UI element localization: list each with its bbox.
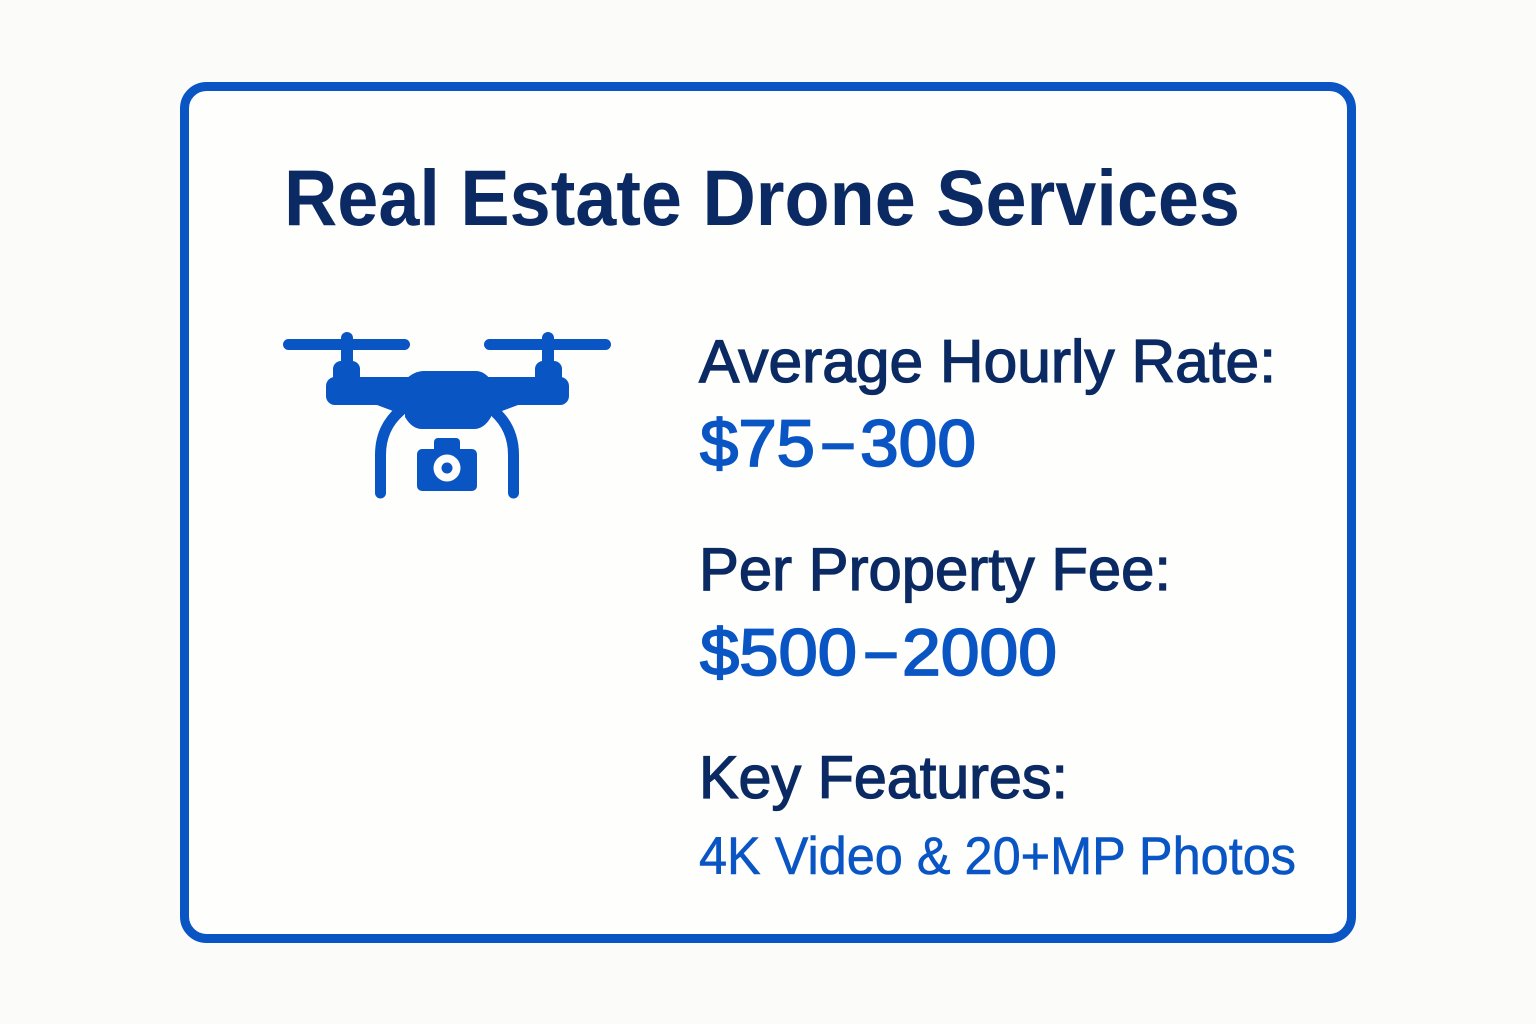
panel: card (184, 86, 1352, 938)
label: per property fee: Per Property Fee: (699, 536, 1171, 603)
icon: drone with camera (283, 332, 611, 493)
label: average hourly rate: Average Hourly Rate: (699, 328, 1276, 395)
label: key features: Key Features: (699, 744, 1068, 811)
value: hourly rate: 300 (860, 406, 976, 480)
value: property fee: $500 (700, 615, 857, 689)
value: property fee: – (866, 612, 896, 686)
value: features: 4K Video & 20+MP Photos (699, 827, 1296, 886)
value: hourly rate: $75 (700, 406, 815, 480)
value: hourly rate: – (823, 403, 853, 477)
value: property fee: 2000 (902, 615, 1057, 689)
title: Real Estate Drone Services (284, 153, 1240, 242)
